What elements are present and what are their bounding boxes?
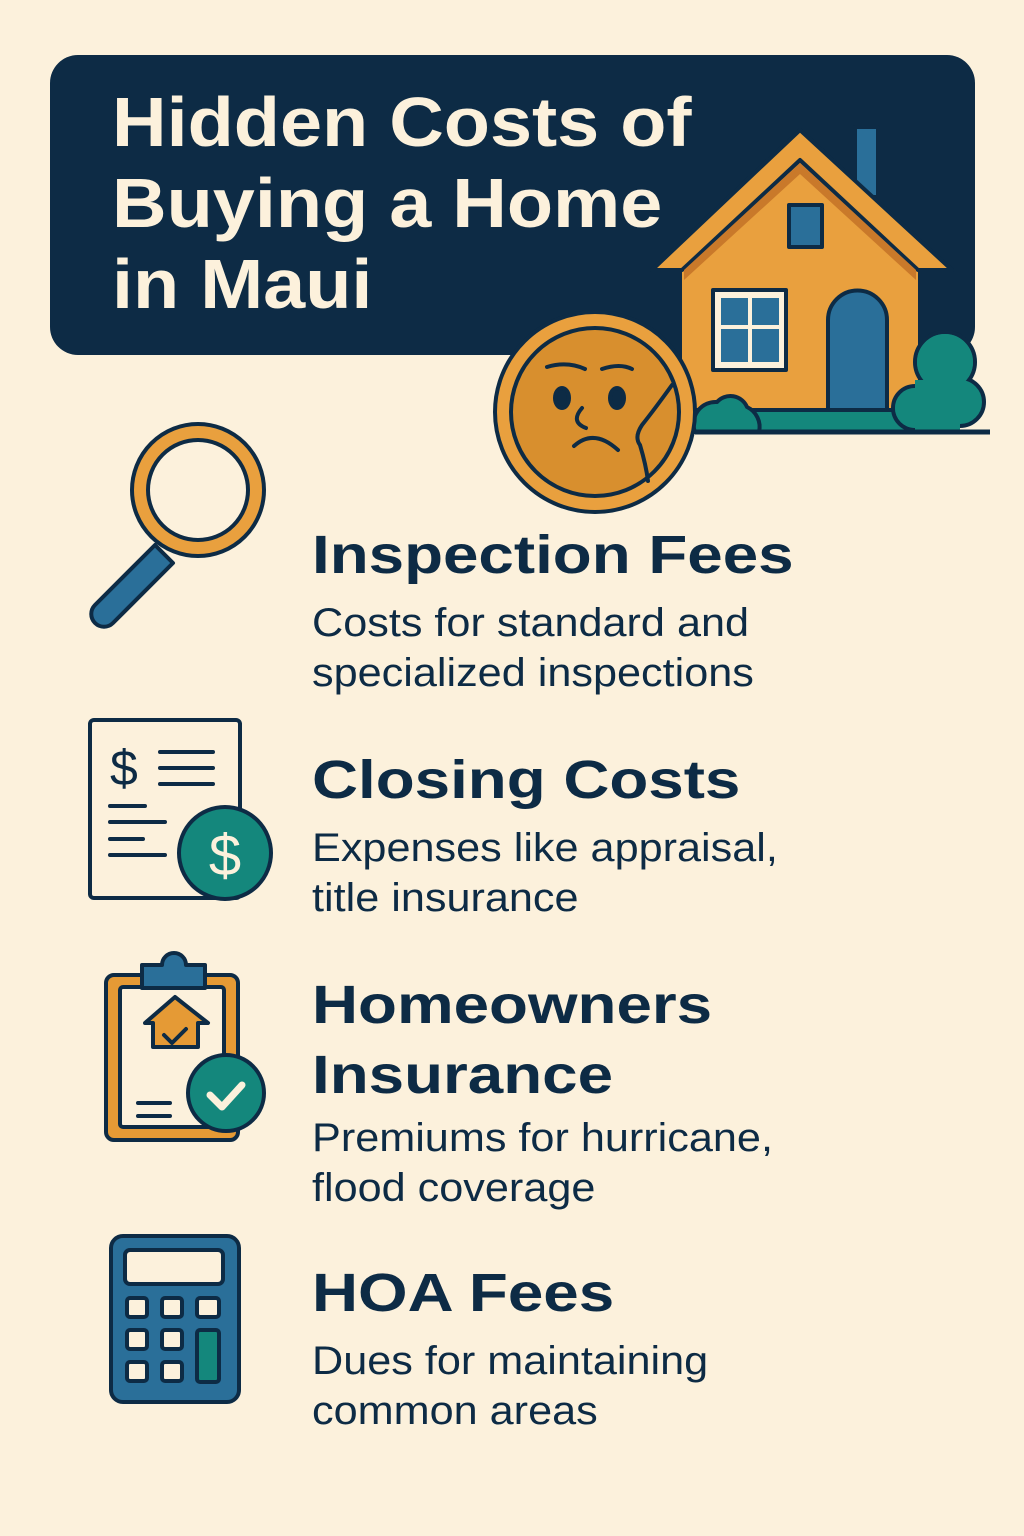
text: closing: Expenses like appraisal, (312, 826, 778, 870)
heading: homeowners insurance (312, 975, 712, 1105)
heading: closing costs: Closing Costs (312, 750, 740, 810)
title: Hidden Costs of (112, 83, 692, 161)
text: insurance (312, 1116, 773, 1210)
heading: inspection fees: Inspection Fees (312, 525, 794, 585)
icon: closing document: $ (209, 823, 241, 888)
title: in Maui (112, 245, 372, 323)
icon: closing document (88, 718, 273, 901)
title (112, 83, 692, 323)
title: Buying a Home (112, 164, 662, 242)
icon: magnifying glass (89, 422, 266, 629)
title panel (50, 55, 975, 355)
text: inspection (312, 601, 754, 695)
text: insurance: flood coverage (312, 1166, 595, 1210)
text: hoa: common areas (312, 1389, 598, 1433)
illustration: house and coin (493, 129, 990, 514)
icon: closing document: $ (110, 740, 138, 796)
heading: homeowners insurance: Homeowners (312, 975, 712, 1035)
text: inspection: Costs for standard and (312, 601, 749, 645)
text: hoa: Dues for maintaining (312, 1339, 708, 1383)
icon: clipboard insurance (104, 951, 266, 1142)
text: closing: title insurance (312, 876, 579, 920)
icon: calculator (109, 1234, 241, 1404)
text: hoa (312, 1339, 708, 1433)
heading: hoa fees: HOA Fees (312, 1263, 614, 1323)
text: closing (312, 826, 778, 920)
text: inspection: specialized inspections (312, 651, 754, 695)
text: insurance: Premiums for hurricane, (312, 1116, 773, 1160)
heading: homeowners insurance: Insurance (312, 1045, 613, 1105)
